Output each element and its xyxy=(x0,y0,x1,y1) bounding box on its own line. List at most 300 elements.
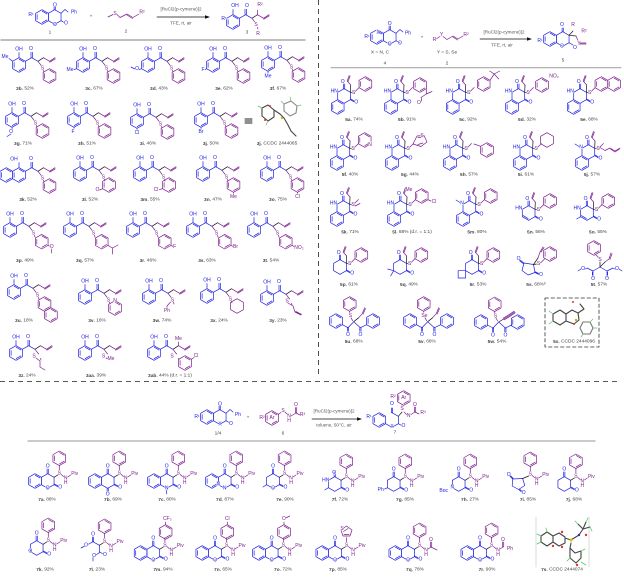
7m xyxy=(134,516,184,572)
7h: 7h, 27% xyxy=(461,496,480,502)
7o: O xyxy=(270,536,274,542)
5p: S xyxy=(348,261,352,267)
7g: 7g, 85% xyxy=(396,496,415,502)
5c xyxy=(446,71,500,122)
7p xyxy=(316,526,366,572)
panel: scheme 3, sulfilimine products xyxy=(28,391,595,572)
3z: O xyxy=(26,334,30,340)
7q: H xyxy=(424,552,428,558)
5k: HN xyxy=(330,200,337,206)
7f xyxy=(322,454,366,502)
7n: 7n, 65% xyxy=(214,566,233,572)
3e: O xyxy=(223,46,227,52)
7e: O xyxy=(271,485,275,491)
reaction header 1 xyxy=(28,2,269,37)
5g: S xyxy=(406,146,410,152)
5v: O xyxy=(432,332,436,338)
7d: H xyxy=(241,480,245,486)
7q: O xyxy=(406,557,410,563)
3p: O xyxy=(20,211,24,217)
7d: O xyxy=(223,464,227,470)
7n: S xyxy=(225,542,229,548)
3q: OH xyxy=(66,212,74,218)
5k: O xyxy=(340,191,344,197)
7r: Ph xyxy=(507,546,513,552)
5w: 5w, 54% xyxy=(488,338,507,344)
crystal structure 3j: 3j, CCDC 2444065 xyxy=(257,140,298,146)
3e: F xyxy=(201,67,205,73)
7c: S xyxy=(177,470,181,476)
5a: HN xyxy=(331,88,338,94)
7i: H xyxy=(535,481,539,487)
7a: 7a, 88% xyxy=(38,496,57,502)
product 3 xyxy=(221,2,269,37)
5r: O xyxy=(469,250,473,256)
3u xyxy=(8,273,57,324)
equals sign xyxy=(245,119,252,123)
3t: 3t, 54% xyxy=(263,258,280,264)
3s: S xyxy=(215,230,219,236)
5i: O xyxy=(537,156,541,162)
7g: O xyxy=(404,488,408,494)
7o: O xyxy=(270,557,274,563)
7j: Piv xyxy=(588,474,595,480)
reactant 1: O xyxy=(53,22,57,28)
7c: O xyxy=(165,464,169,470)
5s: O xyxy=(517,256,521,262)
7p: O xyxy=(333,536,337,542)
5j: N xyxy=(579,144,583,150)
7c: N xyxy=(183,476,187,482)
reactant 1/4 xyxy=(194,402,241,436)
product 7: R¹ xyxy=(366,414,372,420)
7o: O xyxy=(282,556,286,562)
3u: OH xyxy=(10,274,18,280)
5b: O xyxy=(394,79,398,85)
7d: 7d, 87% xyxy=(216,496,235,502)
3d xyxy=(131,46,185,92)
3c: 3c, 67% xyxy=(85,86,104,92)
3o: Cl xyxy=(295,194,300,200)
3p: OH xyxy=(6,212,14,218)
reactant 1/4: R¹ xyxy=(194,414,200,420)
7j: H xyxy=(580,483,584,489)
crystal structure 3j xyxy=(257,97,301,146)
reaction header 2 xyxy=(364,21,587,66)
7n: H xyxy=(231,552,235,558)
reactant 2: S xyxy=(113,11,117,17)
reaction arrow: [RuCl2(p-cymene)]2 xyxy=(313,408,355,414)
3b: O xyxy=(29,46,33,52)
product 3: O xyxy=(245,3,249,9)
3q xyxy=(64,211,118,264)
5v: 5v, 66% xyxy=(418,338,437,344)
product 7: R³ xyxy=(420,410,426,416)
7h: Piv xyxy=(482,474,490,480)
3d: 3d, 43% xyxy=(150,86,169,92)
5i: HN xyxy=(513,144,520,150)
5h: 5h, 57% xyxy=(460,172,479,178)
5f: S xyxy=(351,146,355,152)
7l: 7l, 23% xyxy=(89,566,106,572)
7a xyxy=(29,451,79,502)
5t: 5t, 57% xyxy=(591,282,608,288)
7r: 7r, 90% xyxy=(479,566,496,572)
7k: O xyxy=(35,530,39,536)
5g: 5g, 44% xyxy=(401,172,420,178)
5o: 5o, 55% xyxy=(589,229,608,235)
7b: O xyxy=(106,492,110,498)
7a: H xyxy=(64,480,68,486)
5i: O xyxy=(523,135,527,141)
reactant 1: O xyxy=(64,20,68,26)
reactant 1/4: X xyxy=(218,422,222,428)
3g: O xyxy=(9,129,13,135)
3r: F xyxy=(173,244,176,250)
7f: O xyxy=(345,488,349,494)
3aa xyxy=(79,334,121,378)
7a: S xyxy=(58,470,62,476)
5l: O xyxy=(397,191,401,197)
7a: N xyxy=(64,476,68,482)
3n: O xyxy=(213,155,217,161)
7l: O xyxy=(91,532,95,538)
3s: O xyxy=(203,211,207,217)
3f: S xyxy=(290,64,294,70)
7m: CF₃ xyxy=(163,516,172,522)
7m: H xyxy=(169,552,173,558)
5a: O xyxy=(341,79,345,85)
7e: H xyxy=(289,480,293,486)
7b: H xyxy=(124,480,128,486)
7f: N xyxy=(351,478,355,484)
reactant 1/4: O xyxy=(229,421,233,427)
3e xyxy=(201,46,250,92)
3r: S xyxy=(155,230,159,236)
7q: O xyxy=(429,537,433,543)
3h: S xyxy=(96,120,100,126)
3x: OH xyxy=(203,278,211,284)
7i: S xyxy=(529,471,533,477)
3g: OH xyxy=(8,102,16,108)
reactant 6: N xyxy=(287,414,291,420)
product 7: O xyxy=(413,402,417,408)
3j xyxy=(195,101,238,146)
7o: Piv xyxy=(295,543,303,549)
3k: S xyxy=(41,175,45,181)
5i: S xyxy=(534,146,538,152)
5n xyxy=(515,192,556,235)
product 5: R² xyxy=(581,28,587,34)
reactant 1: O xyxy=(53,2,57,8)
5k: 5k, 71% xyxy=(341,229,360,235)
3i: S xyxy=(159,121,163,127)
5f xyxy=(330,132,372,178)
7b: O xyxy=(118,484,122,490)
3ab: S xyxy=(170,353,174,359)
7b: 7b, 69% xyxy=(104,496,123,502)
3n xyxy=(197,155,240,202)
3c xyxy=(67,46,120,92)
3p: O xyxy=(50,244,54,250)
reaction arrow xyxy=(312,408,362,428)
5r xyxy=(458,246,500,288)
7k: S xyxy=(47,537,51,543)
5g: S xyxy=(420,133,424,139)
3e: 3e, 62% xyxy=(215,86,234,92)
7r: O xyxy=(478,557,482,563)
7e: O xyxy=(271,464,275,470)
3d: S xyxy=(170,65,174,71)
7q: N xyxy=(424,548,428,554)
3e: OH xyxy=(209,46,217,52)
3i: Cl xyxy=(135,130,139,136)
7r: O xyxy=(491,556,495,562)
5c: O xyxy=(469,100,473,106)
3g: 3g, 71% xyxy=(14,140,33,146)
7k: O xyxy=(47,552,51,558)
7j: O xyxy=(562,466,566,472)
3l: S xyxy=(102,174,106,180)
5b xyxy=(384,76,432,122)
5t: O xyxy=(591,276,595,282)
7h: H xyxy=(475,483,479,489)
3n: S xyxy=(225,174,229,180)
3x: S xyxy=(229,296,233,302)
3w: OH xyxy=(145,278,153,284)
3p xyxy=(4,211,54,264)
5o: HN xyxy=(573,206,581,212)
crystal structure 7s: 7s, CCDC 2444074 xyxy=(541,566,583,572)
7r: S xyxy=(490,542,494,548)
3ab: OH xyxy=(150,334,158,340)
3n: Me xyxy=(230,194,237,200)
reaction arrow: [RuCl2(p-cymene)]2 xyxy=(160,6,202,12)
3l: OH xyxy=(76,156,84,162)
5c: O xyxy=(456,79,460,85)
3d: O xyxy=(158,46,162,52)
7o: N xyxy=(288,548,292,554)
5l xyxy=(387,187,436,235)
3aa: O xyxy=(95,334,99,340)
7n xyxy=(196,516,246,572)
product 7: R² xyxy=(390,394,396,400)
7a: Piv xyxy=(71,471,79,477)
7i: 7i, 85% xyxy=(520,496,537,502)
7k: O xyxy=(28,549,32,555)
5d: NO₂ xyxy=(549,74,559,80)
5j: 5j, 57% xyxy=(584,172,601,178)
7m: S xyxy=(163,542,167,548)
3c: OH xyxy=(79,46,87,52)
3i: O xyxy=(147,102,151,108)
7r xyxy=(461,523,513,572)
3ab: 3ab, 44% (d.r. = 1:1) xyxy=(148,372,192,378)
3ab: O xyxy=(164,334,168,340)
5h: S xyxy=(464,146,468,152)
7k: Piv xyxy=(60,538,68,544)
product 3: 3 xyxy=(246,30,249,36)
7p: H xyxy=(351,552,355,558)
product 3: R xyxy=(256,31,260,37)
7r: N xyxy=(496,548,500,554)
7q: O xyxy=(406,536,410,542)
3j: Br xyxy=(198,129,204,135)
5n: O xyxy=(539,216,543,222)
reactant 1 xyxy=(28,2,77,36)
5l: Me xyxy=(406,187,413,193)
7h: O xyxy=(457,466,461,472)
7l: H xyxy=(109,548,113,554)
3g: S xyxy=(34,120,38,126)
5h: O xyxy=(467,156,471,162)
3v: 3v, 16% xyxy=(88,318,107,324)
rule xyxy=(28,440,595,442)
5d: 5d, 32% xyxy=(518,116,537,122)
3b: 3b, 52% xyxy=(16,86,35,92)
7d: S xyxy=(235,470,239,476)
3m: OH xyxy=(136,156,144,162)
reactant 4: X xyxy=(376,30,380,36)
7j: S xyxy=(574,473,578,479)
5u: O xyxy=(358,332,362,338)
reactant 2: R² xyxy=(139,10,145,16)
5r: O xyxy=(482,270,486,276)
3ab: Cl xyxy=(194,353,198,359)
5p: O xyxy=(350,270,354,276)
3w: O xyxy=(159,278,163,284)
3r: 3r, 46% xyxy=(140,258,157,264)
7h: Boc xyxy=(439,488,449,494)
reactant 2 with Y: R² xyxy=(463,32,469,38)
5v: Se xyxy=(421,313,428,319)
5i xyxy=(513,132,553,178)
3o xyxy=(261,155,304,202)
7d xyxy=(206,451,256,502)
3q: S xyxy=(92,230,96,236)
rule xyxy=(331,67,621,69)
5f: O xyxy=(354,156,358,162)
3k: OH xyxy=(10,156,18,162)
3c: Me xyxy=(67,67,74,73)
5c: S xyxy=(467,90,471,96)
3h xyxy=(68,101,111,146)
product 5: Y xyxy=(577,41,581,47)
crystal box 5x xyxy=(545,298,599,347)
7m: O xyxy=(151,536,155,542)
reactant 1/4: 1/4 xyxy=(215,430,222,436)
3r xyxy=(127,211,176,264)
5a: 5a, 74% xyxy=(345,116,364,122)
product 7: N xyxy=(407,413,411,419)
7i: O xyxy=(507,472,511,478)
5q: O xyxy=(410,270,414,276)
3o: S xyxy=(289,174,293,180)
3z xyxy=(10,334,52,378)
plus sign: + xyxy=(247,416,250,420)
7h: N xyxy=(451,485,455,491)
3u: O xyxy=(24,273,28,279)
3h: 3h, 51% xyxy=(78,140,97,146)
7c xyxy=(148,451,198,502)
3n: 3n, 47% xyxy=(204,196,223,202)
3o: O xyxy=(277,155,281,161)
5e: O xyxy=(577,79,581,85)
panel: scheme 2, quaternary dicarbonyl products xyxy=(330,21,622,347)
3q: 3q, 57% xyxy=(76,258,95,264)
7h: S xyxy=(469,473,473,479)
3b: S xyxy=(41,65,45,71)
reaction arrow: TFE, rt, air xyxy=(170,20,192,26)
3z: OH xyxy=(12,334,20,340)
3y xyxy=(261,279,303,324)
3q: O xyxy=(80,211,84,217)
3h: O xyxy=(84,101,88,107)
3c: O xyxy=(93,46,97,52)
product 5: 5 xyxy=(562,58,565,64)
7a: O xyxy=(46,464,50,470)
5h: O xyxy=(453,135,457,141)
5s: O xyxy=(539,272,543,278)
3x: O xyxy=(217,277,221,283)
reactant 4: Ph xyxy=(405,30,411,36)
7c: H xyxy=(183,480,187,486)
3m: Cl xyxy=(154,187,158,193)
5s: 5s, 68%ᵇ xyxy=(526,282,546,288)
7h xyxy=(439,454,490,502)
7g xyxy=(378,454,425,502)
3m: S xyxy=(162,174,166,180)
7b: O xyxy=(106,464,110,470)
7q: S xyxy=(418,542,422,548)
product 7: O xyxy=(402,423,406,429)
7p: O xyxy=(333,557,337,563)
3z: 3z, 24% xyxy=(18,372,36,378)
reactant 1/4: O xyxy=(218,402,222,408)
7q: 7q, 78% xyxy=(406,566,425,572)
3t: OH xyxy=(250,212,258,218)
7e: O xyxy=(284,484,288,490)
3s: OH xyxy=(189,212,197,218)
reactant 2 xyxy=(108,10,145,34)
5p xyxy=(334,246,368,288)
7d: N xyxy=(223,485,227,491)
3t: S xyxy=(276,230,280,236)
7q xyxy=(389,523,437,572)
5k xyxy=(330,188,360,235)
7l xyxy=(81,519,124,572)
5e: 5e, 68% xyxy=(580,116,599,122)
reactant 1: Ph xyxy=(71,10,77,16)
3g: O xyxy=(22,101,26,107)
5p: 5p, 61% xyxy=(340,282,359,288)
rule xyxy=(1,39,305,41)
7f: S xyxy=(345,473,349,479)
3p: S xyxy=(32,230,36,236)
7c: N xyxy=(165,485,169,491)
5q: S xyxy=(408,261,412,267)
7m: O xyxy=(164,556,168,562)
5o: O xyxy=(584,196,588,202)
reactant 1/4: Ph xyxy=(235,412,241,418)
3f: OH xyxy=(264,46,272,52)
7n: N xyxy=(231,548,235,554)
5e: S xyxy=(588,90,592,96)
reactant 6: Ar xyxy=(270,415,275,421)
7e xyxy=(263,451,304,502)
5a: O xyxy=(354,100,358,106)
product 5: O xyxy=(560,44,564,50)
